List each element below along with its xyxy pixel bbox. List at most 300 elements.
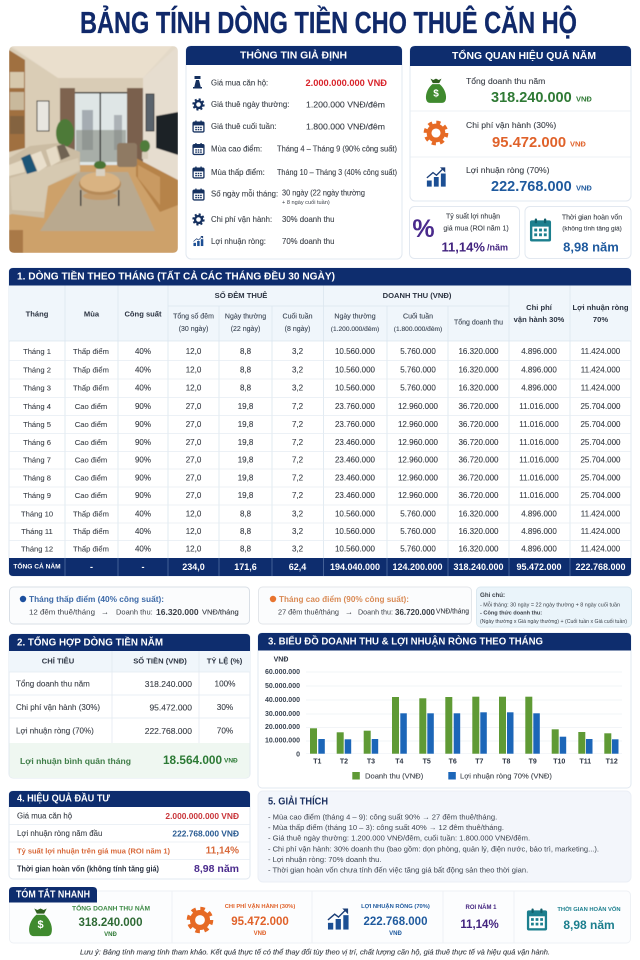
panel: monthly cash flow table	[9, 268, 631, 576]
table header: Tổng số đêm	[173, 312, 214, 320]
table header: Lợi nhuận ròng	[572, 303, 629, 312]
row: month 11: Tháng 11	[21, 527, 53, 536]
row: month 5	[23, 420, 621, 429]
row: month 1: 12,0	[186, 347, 202, 356]
row: month 7	[23, 456, 621, 464]
row: weekday rent: 1.200.000 VNĐ/đêm	[306, 100, 385, 110]
row: month 2: 40%	[135, 366, 151, 374]
kpi: net profit: 222.768.000	[491, 179, 572, 195]
row: weekend rent: Giá thuê cuối tuần:	[211, 122, 276, 131]
row: purchase price: Giá mua căn hộ	[17, 812, 73, 820]
card: ROI: %	[412, 215, 435, 243]
average monthly profit: VNĐ	[224, 758, 238, 764]
table header: (30 ngày)	[179, 326, 208, 333]
x axis labels: T8	[502, 758, 510, 766]
kpi: total revenue: 318.240.000	[491, 90, 572, 106]
summary: payback: 8,98 năm	[563, 918, 615, 932]
row: ROI	[17, 846, 239, 856]
row: yearly total: 234,0	[182, 562, 205, 572]
summary: ROI: ROI NĂM 1	[465, 904, 497, 911]
row: month 4: 27,0	[186, 402, 202, 411]
table header: Tháng	[26, 310, 49, 318]
summary table header: SỐ TIỀN (VNĐ)	[133, 656, 187, 666]
row: month 6: 36.720.000	[458, 438, 499, 447]
row: operating cost: 30%	[217, 703, 233, 712]
kpi: operating cost: Chi phí vận hành (30%)	[466, 120, 556, 130]
x axis labels: T6	[449, 758, 457, 766]
row: first year net profit	[17, 828, 239, 838]
note box: - Mỗi tháng: 30 ngày = 22 ngày thường + 8 ngày cuối tuần	[480, 602, 620, 608]
row: month 10: 5.760.000	[400, 510, 436, 518]
x axis labels: T2	[340, 758, 348, 766]
row: days per month: Số ngày mỗi tháng:	[211, 190, 278, 198]
row: month 2: 10.560.000	[335, 366, 376, 374]
row: month 4: 36.720.000	[458, 402, 499, 411]
row: month 8: 11.016.000	[519, 474, 559, 482]
row: yearly total	[9, 558, 631, 576]
row: month 10: 40%	[135, 510, 151, 518]
row: month 9: 7,2	[292, 491, 304, 500]
row: peak season	[193, 143, 397, 154]
row: month 12: 5.760.000	[400, 544, 436, 554]
kpi: operating cost: VNĐ	[570, 140, 586, 148]
row: ROI: Tỷ suất lợi nhuận trên giá mua (ROI năm 1)	[17, 846, 170, 856]
row: peak season: Tháng 4 – Tháng 9 (90% công suất)	[277, 144, 397, 154]
row: month 8: 27,0	[186, 474, 202, 482]
row: month 8: 23.460.000	[335, 474, 376, 482]
row: total revenue: Tổng doanh thu năm	[16, 680, 90, 688]
card: payback period	[525, 206, 631, 258]
row: net profit: Lợi nhuận ròng:	[211, 237, 266, 246]
row: month 8	[23, 474, 621, 482]
row: month 4: 7,2	[292, 402, 304, 411]
row: month 10	[21, 510, 621, 518]
row: month 4: 23.760.000	[335, 402, 376, 411]
summary: total revenue: $	[37, 919, 44, 931]
row: weekday rent: Giá thuê ngày thường:	[211, 100, 289, 109]
panel header: assumptions: THÔNG TIN GIẢ ĐỊNH	[240, 48, 347, 62]
row: operating cost: Chi phí vận hành (30%)	[16, 703, 100, 712]
row: month 2: 5.760.000	[400, 366, 436, 374]
net profit bars	[318, 712, 618, 754]
row: month 11: 10.560.000	[335, 527, 376, 536]
illustration: apartment living room photo	[9, 46, 178, 253]
row: month 10: 11.424.000	[581, 510, 621, 518]
row: month 3: 10.560.000	[335, 384, 376, 392]
row: month 3: 16.320.000	[458, 384, 499, 392]
row: month 6	[23, 438, 621, 447]
y axis labels: VNĐ	[274, 656, 288, 664]
row: month 5: 7,2	[292, 420, 304, 429]
explanation list	[268, 812, 599, 874]
x axis labels: T3	[367, 758, 375, 766]
row: month 3: Thấp điểm	[73, 384, 109, 392]
row: payback	[17, 863, 239, 875]
y axis labels	[265, 656, 300, 758]
row: days per month: + 8 ngày cuối tuần)	[282, 200, 330, 206]
callout: peak season: VNĐ/tháng	[436, 608, 469, 616]
panel header: annual overview: TỔNG QUAN HIỆU QUẢ NĂM	[452, 49, 596, 62]
row: yearly total: 124.200.000	[392, 562, 443, 572]
row: low season: Tháng 10 – Tháng 3 (40% công suất)	[277, 168, 397, 177]
summary: payback	[527, 905, 621, 932]
row: month 5: 90%	[135, 420, 151, 429]
section heading 3: 3. BIỂU ĐỒ DOANH THU & LỢI NHUẬN RÒNG THEO THÁNG	[268, 634, 543, 648]
summary: payback: THỜI GIAN HOÀN VỐN	[557, 905, 621, 913]
row: month 2: Tháng 2	[23, 366, 51, 374]
row: month 7: Cao điểm	[75, 456, 107, 464]
row: month 5: 25.704.000	[580, 420, 621, 429]
row: month 6: Tháng 6	[23, 438, 51, 447]
row: month 12: 3,2	[292, 544, 304, 554]
row: month 2: 8,8	[240, 366, 252, 374]
row: month 11: 4.896.000	[521, 527, 557, 536]
chart legend	[352, 772, 552, 780]
row: month 12: 12,0	[186, 544, 202, 554]
callout: low season: VNĐ/tháng	[202, 608, 239, 616]
row: month 1: 40%	[135, 347, 151, 356]
section heading 4	[9, 791, 250, 807]
row: net profit	[193, 236, 334, 246]
row: month 1: 3,2	[292, 347, 304, 356]
section heading 3	[258, 633, 631, 650]
table header: Mùa	[84, 310, 100, 318]
row: yearly total: 171,6	[234, 562, 257, 572]
row: low season: Mùa thấp điểm:	[211, 168, 265, 177]
row: month 9: 11.016.000	[519, 491, 559, 500]
explanation list: - Mùa cao điểm (tháng 4 – 9): công suất 90% → 27 đêm thuê/tháng.	[268, 812, 497, 822]
callout: low season: →	[101, 608, 109, 616]
table header: 70%	[593, 315, 608, 324]
row: month 4	[23, 402, 621, 411]
x axis labels: T11	[579, 758, 591, 766]
card: ROI: /năm	[487, 242, 508, 252]
row: month 6: 90%	[135, 438, 151, 447]
y axis labels: 40.000.000	[265, 697, 300, 704]
row: month 4: 12.960.000	[398, 402, 439, 411]
kpi: total revenue	[426, 76, 592, 106]
summary: total revenue	[29, 904, 150, 938]
row: month 12: 4.896.000	[521, 544, 557, 554]
note box	[476, 587, 632, 627]
explanation list: - Mùa thấp điểm (tháng 10 – 3): công suất 40% → 12 đêm thuê/tháng.	[268, 823, 504, 832]
table header: Ngày thường	[334, 314, 376, 320]
chart legend: Doanh thu (VNĐ)	[365, 772, 424, 780]
row: month 10: 8,8	[240, 510, 252, 518]
row: month 3: 5.760.000	[400, 384, 436, 392]
panel header: annual overview	[410, 46, 631, 66]
row: month 9: 23.460.000	[335, 491, 376, 500]
table title bar	[9, 268, 631, 286]
row: purchase price	[17, 811, 239, 821]
kpi: operating cost: 95.472.000	[492, 135, 566, 151]
card: ROI: Tỷ suất lợi nhuận	[446, 212, 500, 220]
row: month 12: 16.320.000	[458, 544, 499, 554]
row: month 8: 90%	[135, 474, 151, 482]
row: month 10: 4.896.000	[521, 510, 557, 518]
row: month 1: Thấp điểm	[73, 347, 109, 356]
row: month 9: 36.720.000	[458, 491, 499, 500]
row: month 2: 12,0	[186, 366, 202, 374]
x axis labels: T9	[529, 758, 537, 766]
summary: total revenue: VNĐ	[104, 932, 117, 938]
row: month 10: Tháng 10	[21, 510, 53, 518]
row: month 11: 5.760.000	[400, 527, 436, 536]
summary: ROI	[460, 904, 499, 931]
kpi: total revenue: Tổng doanh thu năm	[466, 76, 545, 86]
summary: net profit: VNĐ	[389, 931, 402, 937]
row: payback: 8,98 năm	[194, 863, 239, 875]
row: month 4: 19,8	[238, 402, 254, 411]
callout: peak season: 36.720.000	[395, 607, 435, 617]
card: ROI: giá mua (ROI năm 1)	[443, 226, 509, 232]
row: month 12: 40%	[135, 544, 151, 554]
callout: peak season: Tháng cao điểm (90% công suất):	[279, 594, 409, 604]
row: month 3: 40%	[135, 384, 151, 392]
row: first year net profit: Lợi nhuận ròng năm đầu	[17, 829, 102, 838]
row: month 11: 16.320.000	[458, 527, 499, 536]
row: month 3: 12,0	[186, 384, 202, 392]
row: month 12: 10.560.000	[335, 544, 376, 554]
table header: Chi phí	[526, 303, 553, 312]
panel: quick summary	[9, 887, 630, 943]
y axis labels: 30.000.000	[265, 711, 300, 718]
summary: ROI: 11,14%	[460, 919, 499, 931]
table title bar: 1. DÒNG TIỀN THEO THÁNG (TẤT CẢ CÁC THÁNG ĐỀU 30 NGÀY)	[17, 270, 335, 282]
row: month 8: 36.720.000	[458, 474, 499, 482]
row: month 12: 8,8	[240, 544, 252, 554]
row: month 11: 12,0	[186, 527, 202, 536]
row: month 3: Tháng 3	[23, 384, 51, 392]
row: month 6: 25.704.000	[580, 438, 621, 447]
row: yearly total: 318.240.000	[453, 562, 504, 572]
row: month 11: 3,2	[292, 527, 304, 536]
table header: Tổng doanh thu	[454, 318, 503, 326]
row: net profit: 222.768.000	[145, 726, 192, 736]
kpi: net profit	[427, 165, 592, 195]
summary: total revenue: TỔNG DOANH THU NĂM	[72, 904, 150, 912]
quick summary heading: TÓM TẮT NHANH	[16, 888, 90, 900]
row: month 10: 16.320.000	[458, 510, 499, 518]
row: purchase price: 2.000.000.000 VNĐ	[306, 78, 388, 88]
note box: (Ngày thường x Giá ngày thường) + (Cuối tuần x Giá cuối tuần)	[480, 619, 627, 625]
x axis labels: T5	[423, 758, 431, 766]
table header: vận hành 30%	[514, 315, 565, 324]
row: month 11: 40%	[135, 527, 151, 536]
explanation list: - Giá thuê ngày thường: 1.200.000 VNĐ/đêm, cuối tuần: 1.800.000 VNĐ/đêm.	[268, 834, 530, 842]
chart legend: Lợi nhuận ròng 70% (VNĐ)	[460, 772, 552, 780]
note box: Ghi chú:	[480, 592, 505, 599]
kpi: total revenue: $	[433, 88, 439, 100]
card: ROI	[410, 206, 520, 258]
table header: Cuối tuần	[283, 312, 313, 320]
row: month 7: 23.460.000	[335, 456, 376, 464]
row: month 4: Tháng 4	[23, 402, 51, 411]
kpi: operating cost	[426, 120, 586, 151]
row: month 12: Thấp điểm	[73, 544, 109, 554]
row: total revenue: 318.240.000	[145, 679, 192, 689]
card: payback period: Thời gian hoàn vốn	[562, 212, 622, 222]
x axis labels: T4	[395, 758, 403, 766]
row: month 4: 90%	[135, 402, 151, 411]
note box: - Công thức doanh thu:	[480, 610, 542, 616]
row: month 6: 7,2	[292, 438, 304, 447]
section heading 2: 2. TỔNG HỢP DÒNG TIỀN NĂM	[17, 636, 163, 648]
row: month 6: 12.960.000	[398, 438, 439, 447]
row: month 9: 25.704.000	[580, 491, 621, 500]
row: month 3: 11.424.000	[581, 384, 621, 392]
row: month 2: Thấp điểm	[73, 366, 109, 374]
row: yearly total: 62,4	[289, 562, 306, 572]
y axis labels: 20.000.000	[265, 724, 300, 731]
table header: (1.200.000/đêm)	[331, 326, 379, 333]
row: month 7: 7,2	[292, 456, 304, 464]
row: month 11: 8,8	[240, 527, 252, 536]
row: month 7: 25.704.000	[580, 456, 621, 464]
row: month 12	[21, 544, 621, 554]
row: month 1: Tháng 1	[23, 347, 51, 356]
section heading 5: 5. GIẢI THÍCH	[268, 794, 328, 808]
row: month 7: 27,0	[186, 456, 202, 464]
row: month 9	[23, 491, 621, 500]
row: month 6: 11.016.000	[519, 438, 559, 447]
row: yearly total: -	[142, 562, 144, 572]
row: first year net profit: 222.768.000 VNĐ	[172, 828, 239, 838]
row: month 5: Cao điểm	[75, 420, 107, 429]
average monthly profit: 18.564.000	[163, 753, 222, 767]
row: yearly total: 194.040.000	[330, 562, 380, 572]
row: operating cost: 30% doanh thu	[282, 215, 334, 224]
row: month 1	[23, 347, 621, 356]
summary: net profit	[328, 902, 430, 937]
row: month 9: Cao điểm	[75, 491, 107, 500]
x axis labels: T12	[606, 758, 618, 766]
callout: low season	[10, 587, 250, 624]
row: month 11: Thấp điểm	[73, 527, 109, 536]
table header: Cuối tuần	[403, 312, 433, 320]
row: month 5: 36.720.000	[458, 420, 499, 429]
row: total revenue: 100%	[215, 680, 235, 688]
callout: peak season: →	[345, 608, 353, 616]
row: month 6: 23.460.000	[335, 438, 376, 447]
average monthly profit: Lợi nhuận bình quân tháng	[20, 756, 131, 766]
panel: investment performance	[9, 791, 250, 879]
row: low season	[193, 167, 397, 178]
panel: revenue and profit chart	[258, 633, 631, 788]
table header: (1.800.000/đêm)	[394, 326, 442, 333]
row: operating cost: Chi phí vận hành:	[211, 215, 272, 224]
row: month 2: 4.896.000	[521, 366, 557, 374]
row: net profit	[16, 726, 233, 736]
summary table header: TỶ LỆ (%)	[207, 656, 243, 666]
x axis labels	[313, 758, 618, 766]
row: month 9: 90%	[135, 491, 151, 500]
table header: DOANH THU (VNĐ)	[383, 291, 452, 300]
y axis labels: 60.000.000	[265, 669, 300, 676]
row: month 3	[23, 384, 621, 392]
row: month 12: Tháng 12	[21, 544, 53, 554]
x axis labels: T1	[313, 758, 321, 766]
row: purchase price	[193, 76, 388, 88]
row: days per month	[193, 188, 365, 206]
quick summary heading	[9, 887, 97, 902]
summary: total revenue: 318.240.000	[79, 917, 142, 929]
row: month 1: 10.560.000	[335, 347, 376, 356]
row: month 8: 19,8	[238, 474, 254, 482]
row: month 10: 12,0	[186, 510, 202, 518]
row: yearly total: 222.768.000	[575, 562, 626, 572]
callout: peak season	[258, 587, 472, 624]
row: purchase price: 2.000.000.000 VNĐ	[165, 811, 239, 821]
row: month 1: 5.760.000	[400, 347, 436, 356]
row: month 3: 8,8	[240, 384, 252, 392]
panel header: assumptions	[186, 46, 402, 65]
row: net profit: Lợi nhuận ròng (70%)	[16, 726, 94, 736]
row: month 2: 11.424.000	[581, 366, 621, 374]
summary table header	[42, 656, 243, 666]
table header	[9, 286, 631, 558]
row: month 7: 90%	[135, 456, 151, 464]
row: month 4: 25.704.000	[580, 402, 621, 411]
x axis labels: T7	[475, 758, 483, 766]
summary: net profit: 222.768.000	[364, 916, 427, 928]
row: month 10: 10.560.000	[335, 510, 376, 518]
row: month 2	[23, 366, 621, 374]
panel: explanation	[258, 791, 631, 882]
summary: operating cost: CHI PHÍ VẬN HÀNH (30%)	[225, 902, 295, 910]
row: month 8: 25.704.000	[580, 474, 621, 482]
row: month 8: Tháng 8	[23, 474, 51, 482]
row: month 9: 19,8	[238, 491, 254, 500]
section heading 4: 4. HIỆU QUẢ ĐẦU TƯ	[17, 792, 111, 804]
row: peak season: Mùa cao điểm:	[211, 144, 262, 154]
y axis labels: 50.000.000	[265, 683, 300, 690]
row: month 12: 11.424.000	[581, 544, 621, 554]
summary: operating cost: 95.472.000	[231, 916, 289, 928]
row: weekend rent	[193, 121, 385, 132]
explanation list: - Thời gian hoàn vốn chưa tính đến việc tăng giá bất động sản theo thời gian.	[268, 866, 528, 874]
callout: peak season: 27 đêm thuê/tháng	[278, 608, 339, 616]
table header: Công suất	[124, 310, 162, 318]
row: month 9: 27,0	[186, 491, 202, 500]
row: month 5: 12.960.000	[398, 420, 439, 429]
row: yearly total: 95.472.000	[516, 562, 562, 572]
summary table header: CHỈ TIÊU	[42, 656, 75, 666]
kpi: net profit: Lợi nhuận ròng (70%)	[466, 165, 550, 175]
y axis labels: 10.000.000	[265, 738, 300, 744]
row: month 8: 7,2	[292, 474, 304, 482]
average monthly profit	[10, 743, 250, 778]
row: net profit: 70% doanh thu	[282, 237, 334, 246]
explanation list: - Chi phí vận hành: 30% doanh thu (bao gồm: dọn phòng, quản lý, điện nước, bảo trì, marketing...).	[268, 844, 599, 854]
row: purchase price: Giá mua căn hộ:	[211, 78, 268, 88]
table header: Ngày thường	[225, 314, 266, 320]
row: month 11	[21, 527, 621, 536]
callout: low season: 16.320.000	[156, 607, 199, 617]
row: month 5: Tháng 5	[23, 420, 51, 429]
summary: operating cost: VNĐ	[254, 931, 267, 937]
summary: operating cost	[189, 902, 295, 937]
callout: peak season: Doanh thu:	[358, 608, 393, 616]
callout: low season: Tháng thấp điểm (40% công suất):	[29, 594, 164, 604]
y axis labels: 0	[296, 752, 300, 758]
row: month 9: Tháng 9	[23, 491, 51, 500]
row: month 1: 16.320.000	[458, 347, 499, 356]
row: month 10: 3,2	[292, 510, 304, 518]
row: month 4: Cao điểm	[75, 402, 107, 411]
kpi: net profit: VNĐ	[576, 184, 592, 192]
row: weekday rent	[193, 99, 385, 110]
